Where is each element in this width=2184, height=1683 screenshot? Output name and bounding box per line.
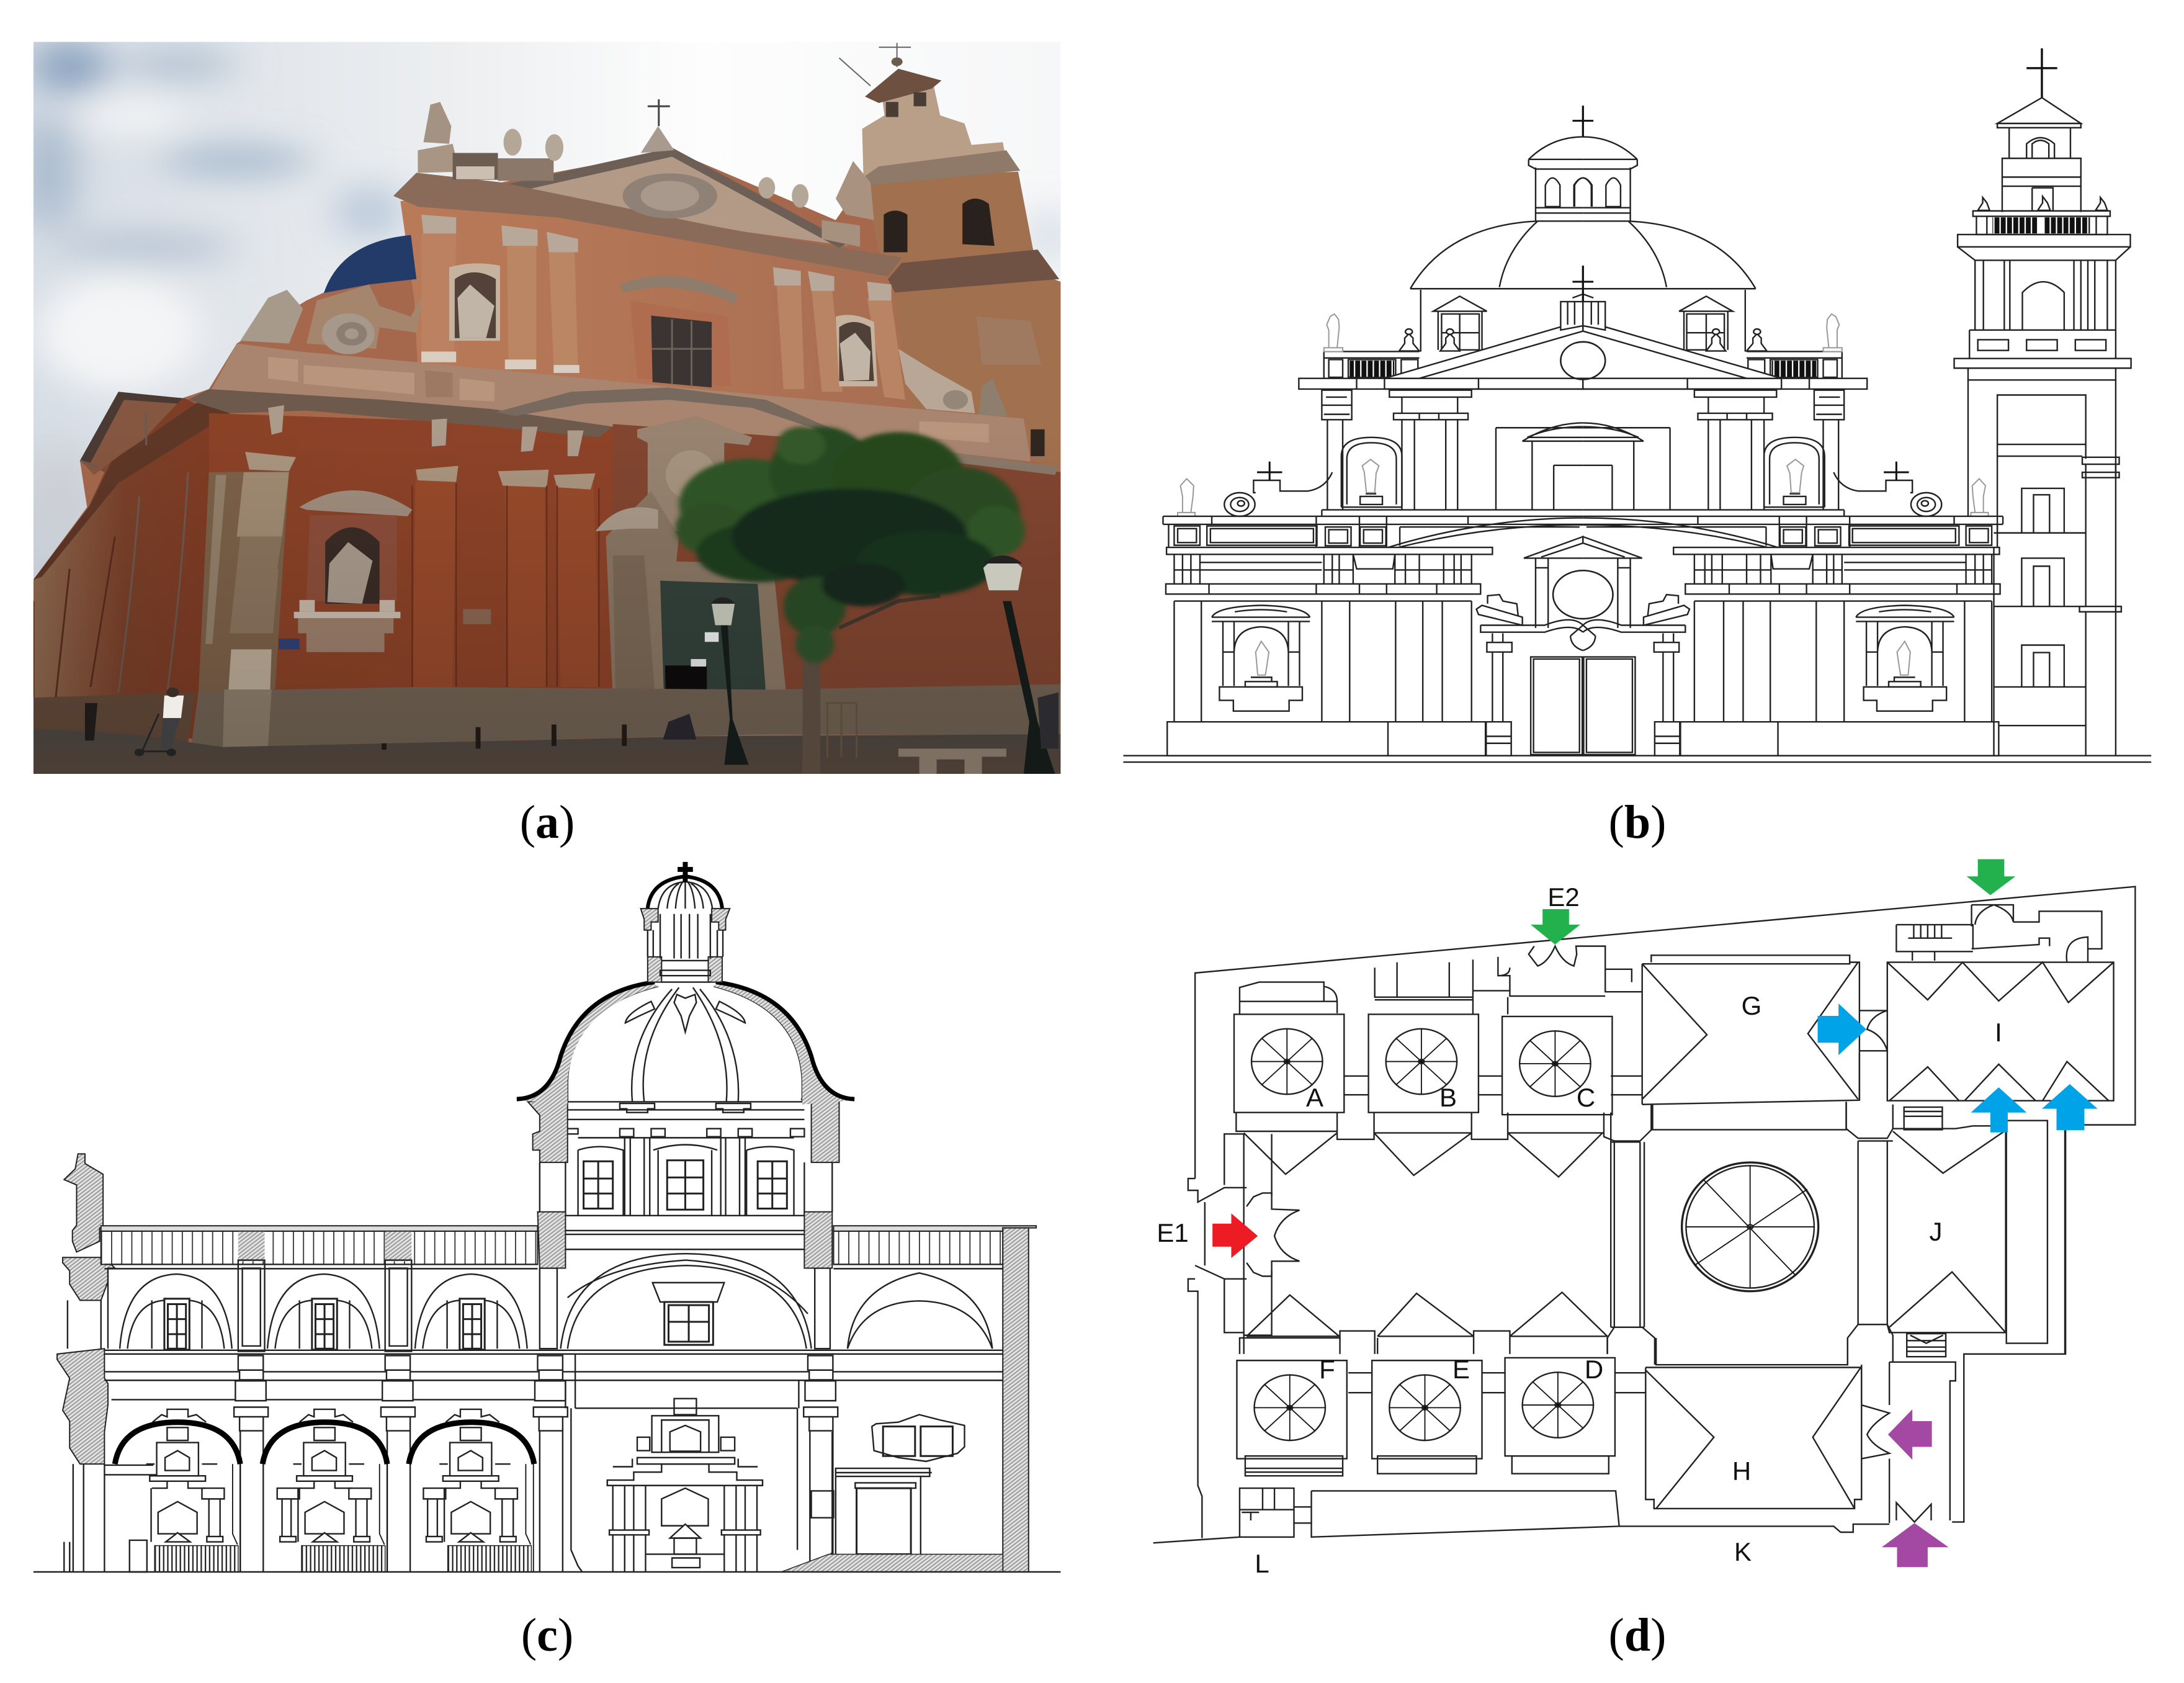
column 4 (803, 1355, 838, 1572)
frieze band (209, 343, 1031, 462)
bell tower (1954, 48, 2131, 756)
caption (b): (b) (1609, 796, 1666, 848)
tower upper stage (1997, 123, 2081, 212)
dome wheel (1682, 1162, 1819, 1291)
pier panels (238, 1260, 830, 1352)
people and scooter (85, 688, 1058, 774)
label K: K (1734, 1537, 1752, 1566)
label E: E (1452, 1355, 1470, 1384)
entablature (1299, 379, 1583, 389)
label L: L (1255, 1549, 1269, 1578)
statue on balustrade (1324, 314, 1343, 351)
drum window right (746, 1147, 794, 1216)
tower finials (1978, 197, 2107, 210)
inner dome (568, 986, 802, 1102)
main entrance doors (1246, 1193, 1299, 1276)
tower cross (2026, 48, 2057, 97)
central cross and finial (1560, 266, 1583, 330)
crossing (517, 862, 854, 1349)
arrow blue up 2 (2042, 1084, 2098, 1130)
nave walls and connecting cells (1224, 1113, 1611, 1354)
tower balustrade (1973, 211, 2110, 235)
arrow red E1 (1212, 1213, 1258, 1258)
nave vault triangles (1244, 1133, 1608, 1336)
plinth (1167, 722, 1486, 756)
chapel C (1502, 1017, 1612, 1115)
roof band and rafters (101, 1226, 1036, 1268)
balustrade and finials (1324, 329, 1460, 379)
arrow purple left (1888, 1409, 1932, 1460)
pediment roundel (1560, 342, 1605, 379)
right half of the facade (mirror of left) (1553, 105, 2003, 756)
rooms above A and B (1240, 959, 1510, 1014)
left wing of the church (34, 392, 237, 743)
label D: D (1585, 1355, 1603, 1384)
room I (1887, 963, 2114, 1101)
sky with clouds (34, 42, 1061, 580)
ground line (34, 1571, 1060, 1573)
arrow green top right (1967, 859, 2015, 895)
caption (d): (d) (1609, 1609, 1666, 1661)
caption (c): (c) (521, 1609, 573, 1661)
wall panel (872, 1415, 965, 1461)
arrow blue up 1 (1971, 1087, 2026, 1133)
altar arch 1 (146, 1409, 240, 1572)
left half of the facade (1163, 105, 1613, 756)
corridor right of J (2007, 1121, 2065, 1354)
side scroll and cross (1224, 462, 1332, 516)
label C: C (1577, 1083, 1595, 1112)
central altar (607, 1399, 763, 1572)
left wall section hatched (57, 1154, 157, 1572)
chapel E (1372, 1360, 1482, 1459)
first floor bay with window (120, 1274, 232, 1350)
caption (a): (a) (520, 796, 575, 848)
portal (596, 416, 790, 735)
stone plinth (34, 684, 1060, 747)
pediment (1384, 320, 1583, 379)
room H (1645, 1338, 1861, 1509)
pediment line work (1357, 379, 1583, 389)
plan room labels (1157, 882, 2002, 1578)
label E2: E2 (1547, 882, 1580, 912)
thick dome outline (517, 982, 854, 1099)
label J: J (1930, 1217, 1942, 1246)
thin corridors between chapels (1344, 1076, 1645, 1393)
ramp (781, 1554, 1003, 1572)
right bay vault (848, 1273, 992, 1349)
tower lantern (1997, 97, 2081, 123)
upper brick wall (400, 201, 825, 401)
lantern cupola (648, 876, 722, 909)
column 2 (381, 1355, 415, 1572)
dome (1410, 105, 1591, 351)
column (234, 1355, 268, 1572)
drum window left (578, 1147, 624, 1216)
bottom chapel vestibules (1245, 1456, 1609, 1476)
central window (653, 1283, 724, 1345)
label G: G (1742, 991, 1761, 1020)
thick arches (115, 1422, 534, 1464)
cornice over lower storey (188, 387, 1058, 475)
tower cornice (1954, 359, 2131, 380)
label B: B (1439, 1083, 1457, 1112)
room G (1642, 955, 1860, 1129)
room J (1887, 1126, 2007, 1332)
pediment and cornice (393, 99, 902, 276)
chapel F (1237, 1360, 1347, 1459)
hatched piers (528, 1099, 839, 1268)
street lamps (705, 555, 1055, 774)
building underlay (34, 150, 1060, 774)
niche with statue (279, 490, 491, 652)
panel (c): longitudinal section drawing (34, 862, 1060, 1572)
label H: H (1732, 1456, 1751, 1486)
drum (540, 1102, 832, 1249)
right side door of H and passage (1861, 1362, 1956, 1523)
lower niche (1212, 605, 1310, 711)
column 3 (534, 1355, 568, 1572)
brackets (565, 1103, 804, 1137)
pilasters and capitals of upper storey (421, 215, 905, 400)
frieze (1163, 516, 1583, 547)
chapel D (1505, 1358, 1615, 1456)
panel (b): front elevation drawing (1124, 48, 2151, 762)
E2 entrance doors (1498, 946, 1642, 996)
side pilasters crossing (565, 1354, 834, 1572)
dome tiled (324, 235, 416, 293)
dome hatching (517, 982, 854, 1105)
central arch (561, 1254, 812, 1349)
altar arch 3 (439, 1409, 534, 1572)
label I: I (1995, 1018, 2002, 1047)
tree (676, 427, 1025, 774)
lower entablature and pilasters (1166, 547, 1492, 722)
side door (836, 1468, 932, 1555)
tower capitals (2080, 457, 2121, 612)
door between G and I (1850, 963, 1887, 1101)
balustrade and statues on the skyline (240, 102, 808, 354)
lantern cross (678, 862, 693, 882)
top right service rooms (1896, 905, 2101, 963)
arrow purple up (1882, 1523, 1949, 1567)
outer statue (1178, 478, 1195, 516)
third bay (415, 1274, 527, 1350)
lantern (641, 909, 730, 959)
lower brick wall (209, 413, 1060, 698)
arrow green E2 (1531, 909, 1580, 945)
site boundary (1153, 887, 2135, 1543)
panel (d): floor plan (1153, 859, 2135, 1567)
crossing piers (1604, 1102, 1893, 1365)
balusters right (2044, 217, 2090, 233)
arrow blue right (1818, 1003, 1866, 1055)
second bay (267, 1274, 380, 1350)
tower shaft (1968, 380, 2116, 756)
panel (a): photograph of the church (24, 40, 1063, 774)
label A: A (1306, 1083, 1323, 1112)
stone corner quoins (199, 471, 289, 693)
tower belfry (1958, 235, 2130, 359)
central window (1496, 423, 1583, 510)
altar arch 2 (293, 1409, 387, 1572)
chapel B (1369, 1014, 1479, 1113)
bottom left rooms (1240, 1488, 1619, 1537)
left columns of altars two and three (277, 1488, 445, 1542)
balusters (1992, 217, 2038, 233)
label F: F (1319, 1355, 1335, 1384)
right wall hatched (1003, 1228, 1029, 1572)
drum window centre (653, 1145, 717, 1216)
floor bands (104, 1350, 1003, 1408)
lower shading (34, 429, 1060, 774)
dormer window (1433, 296, 1487, 351)
lantern base (648, 957, 722, 982)
portal (1477, 537, 1613, 756)
dome ornament (625, 994, 745, 1032)
transept and crossing (1611, 1141, 1887, 1327)
chapel A (1234, 1014, 1344, 1113)
ground (34, 729, 1060, 774)
stairs (1904, 1107, 1946, 1357)
tower (836, 43, 1060, 472)
label E1: E1 (1157, 1218, 1189, 1247)
ground lines (1124, 756, 2151, 762)
column groups of upper storey (1322, 390, 1583, 516)
side niche with statue (1341, 438, 1402, 507)
